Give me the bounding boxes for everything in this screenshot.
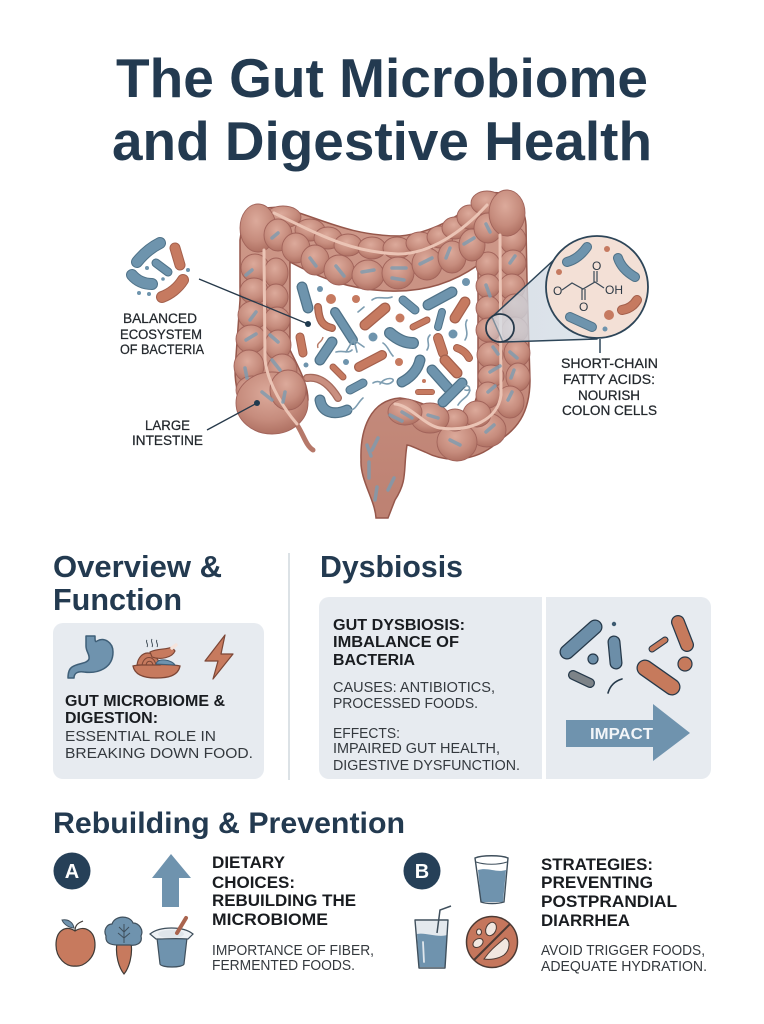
dietary text: REBUILDING THE bbox=[212, 891, 356, 910]
large intestine illustration bbox=[234, 190, 530, 518]
badge A bbox=[54, 852, 90, 890]
label: short-chain fatty acids: COLON CELLS bbox=[562, 403, 657, 418]
bacteria in circle bbox=[556, 246, 637, 332]
strategies text: DIARRHEA bbox=[541, 911, 630, 930]
heading: dysbiosis: Dysbiosis bbox=[320, 549, 463, 584]
heading: rebuilding and prevention: Rebuilding & Prevention bbox=[53, 807, 405, 840]
molecule: O bbox=[553, 284, 562, 298]
label: short-chain fatty acids: FATTY ACIDS: bbox=[563, 372, 655, 387]
molecule: O bbox=[592, 259, 601, 273]
icon: food bowl bbox=[133, 639, 180, 678]
molecule bbox=[553, 259, 623, 314]
leader line: large intestine bbox=[207, 400, 260, 430]
panel: strategies bbox=[404, 852, 707, 975]
panel: overview and function bbox=[53, 623, 264, 779]
molecule: O bbox=[579, 300, 588, 314]
panel text: GUT MICROBIOME & bbox=[65, 693, 225, 710]
label: large intestine bbox=[132, 418, 203, 448]
label: balanced ecosystem bbox=[120, 311, 204, 357]
label: short-chain fatty acids bbox=[561, 356, 658, 418]
heading: overview and function: Function bbox=[53, 582, 182, 617]
label: short-chain fatty acids: SHORT-CHAIN bbox=[561, 356, 658, 371]
bacteria inside the colon wall bbox=[245, 224, 517, 500]
title bbox=[112, 47, 652, 172]
icon: bacteria cluster bbox=[132, 243, 190, 297]
icon: no trigger foods bbox=[466, 916, 518, 968]
panel: gut dysbiosis text bbox=[319, 597, 542, 779]
appendix bbox=[295, 422, 313, 450]
label: balanced ecosystem: OF BACTERIA bbox=[120, 342, 204, 357]
panel: gut dysbiosis text: PROCESSED FOODS. bbox=[333, 695, 478, 712]
dysbiotic bacteria bbox=[567, 622, 692, 693]
heading: overview and function bbox=[53, 549, 222, 617]
strategies text: ADEQUATE HYDRATION. bbox=[541, 958, 707, 975]
magnified circle bbox=[546, 236, 648, 338]
dietary text: DIETARY bbox=[212, 853, 286, 872]
impact arrow: IMPACT bbox=[590, 726, 653, 743]
panel: gut dysbiosis text: IMBALANCE OF bbox=[333, 634, 459, 651]
haustra lobes bbox=[234, 190, 530, 461]
leader line: bacteria bbox=[199, 279, 311, 327]
badge A: A bbox=[65, 861, 79, 883]
icon: carrot with leaves bbox=[105, 917, 142, 974]
heading: overview and function: Overview & bbox=[53, 549, 222, 584]
panel: impact bbox=[546, 597, 711, 779]
label: balanced ecosystem: BALANCED bbox=[123, 311, 197, 326]
icon: stomach bbox=[68, 636, 113, 678]
icon: up arrow bbox=[152, 854, 191, 907]
badge B: B bbox=[415, 861, 429, 883]
icon: glass with straw bbox=[415, 906, 451, 968]
badge B bbox=[404, 852, 440, 890]
label: large intestine: LARGE bbox=[145, 418, 190, 433]
taenia bands bbox=[264, 205, 501, 429]
panel: gut dysbiosis text: GUT DYSBIOSIS: bbox=[333, 617, 465, 634]
label: large intestine: INTESTINE bbox=[132, 433, 203, 448]
panel: gut dysbiosis text: CAUSES: ANTIBIOTICS, bbox=[333, 679, 495, 696]
icon: yogurt cup bbox=[150, 918, 193, 967]
strategies text: STRATEGIES: bbox=[541, 855, 653, 874]
panel text bbox=[65, 693, 253, 762]
label: short-chain fatty acids: NOURISH bbox=[578, 388, 640, 403]
panel text: ESSENTIAL ROLE IN bbox=[65, 728, 216, 745]
panel: gut dysbiosis text: IMPAIRED GUT HEALTH, bbox=[333, 740, 500, 757]
molecule: OH bbox=[605, 283, 623, 297]
strategies text: PREVENTING bbox=[541, 873, 653, 892]
icon: apple bbox=[56, 920, 95, 966]
panel text: DIGESTION: bbox=[65, 710, 158, 727]
dietary text bbox=[212, 853, 374, 974]
impact arrow bbox=[566, 704, 690, 761]
strategies text: AVOID TRIGGER FOODS, bbox=[541, 942, 705, 959]
dietary text: IMPORTANCE OF FIBER, bbox=[212, 942, 374, 959]
magnifier cone bbox=[492, 257, 597, 342]
dietary text: FERMENTED FOODS. bbox=[212, 957, 355, 974]
icon: glass of water bbox=[475, 856, 508, 904]
central bacteria community bbox=[300, 278, 470, 413]
colon body bbox=[235, 193, 530, 518]
panel: dietary choices bbox=[54, 852, 374, 974]
callout: magnified short-chain fatty acids bbox=[486, 236, 658, 418]
icon: lightning bolt bbox=[205, 635, 233, 679]
strategies text: POSTPRANDIAL bbox=[541, 892, 677, 911]
dietary text: MICROBIOME bbox=[212, 910, 328, 929]
strategies text bbox=[541, 855, 707, 975]
title: The Gut Microbiome bbox=[116, 47, 648, 109]
title: and Digestive Health bbox=[112, 110, 652, 172]
panel text: BREAKING DOWN FOOD. bbox=[65, 745, 253, 762]
dietary text: CHOICES: bbox=[212, 873, 295, 892]
panel: gut dysbiosis text: DIGESTIVE DYSFUNCTION. bbox=[333, 757, 520, 774]
label: balanced ecosystem: ECOSYSTEM bbox=[120, 327, 202, 342]
panel: gut dysbiosis text: EFFECTS: bbox=[333, 725, 400, 742]
panel: gut dysbiosis text: BACTERIA bbox=[333, 652, 415, 669]
